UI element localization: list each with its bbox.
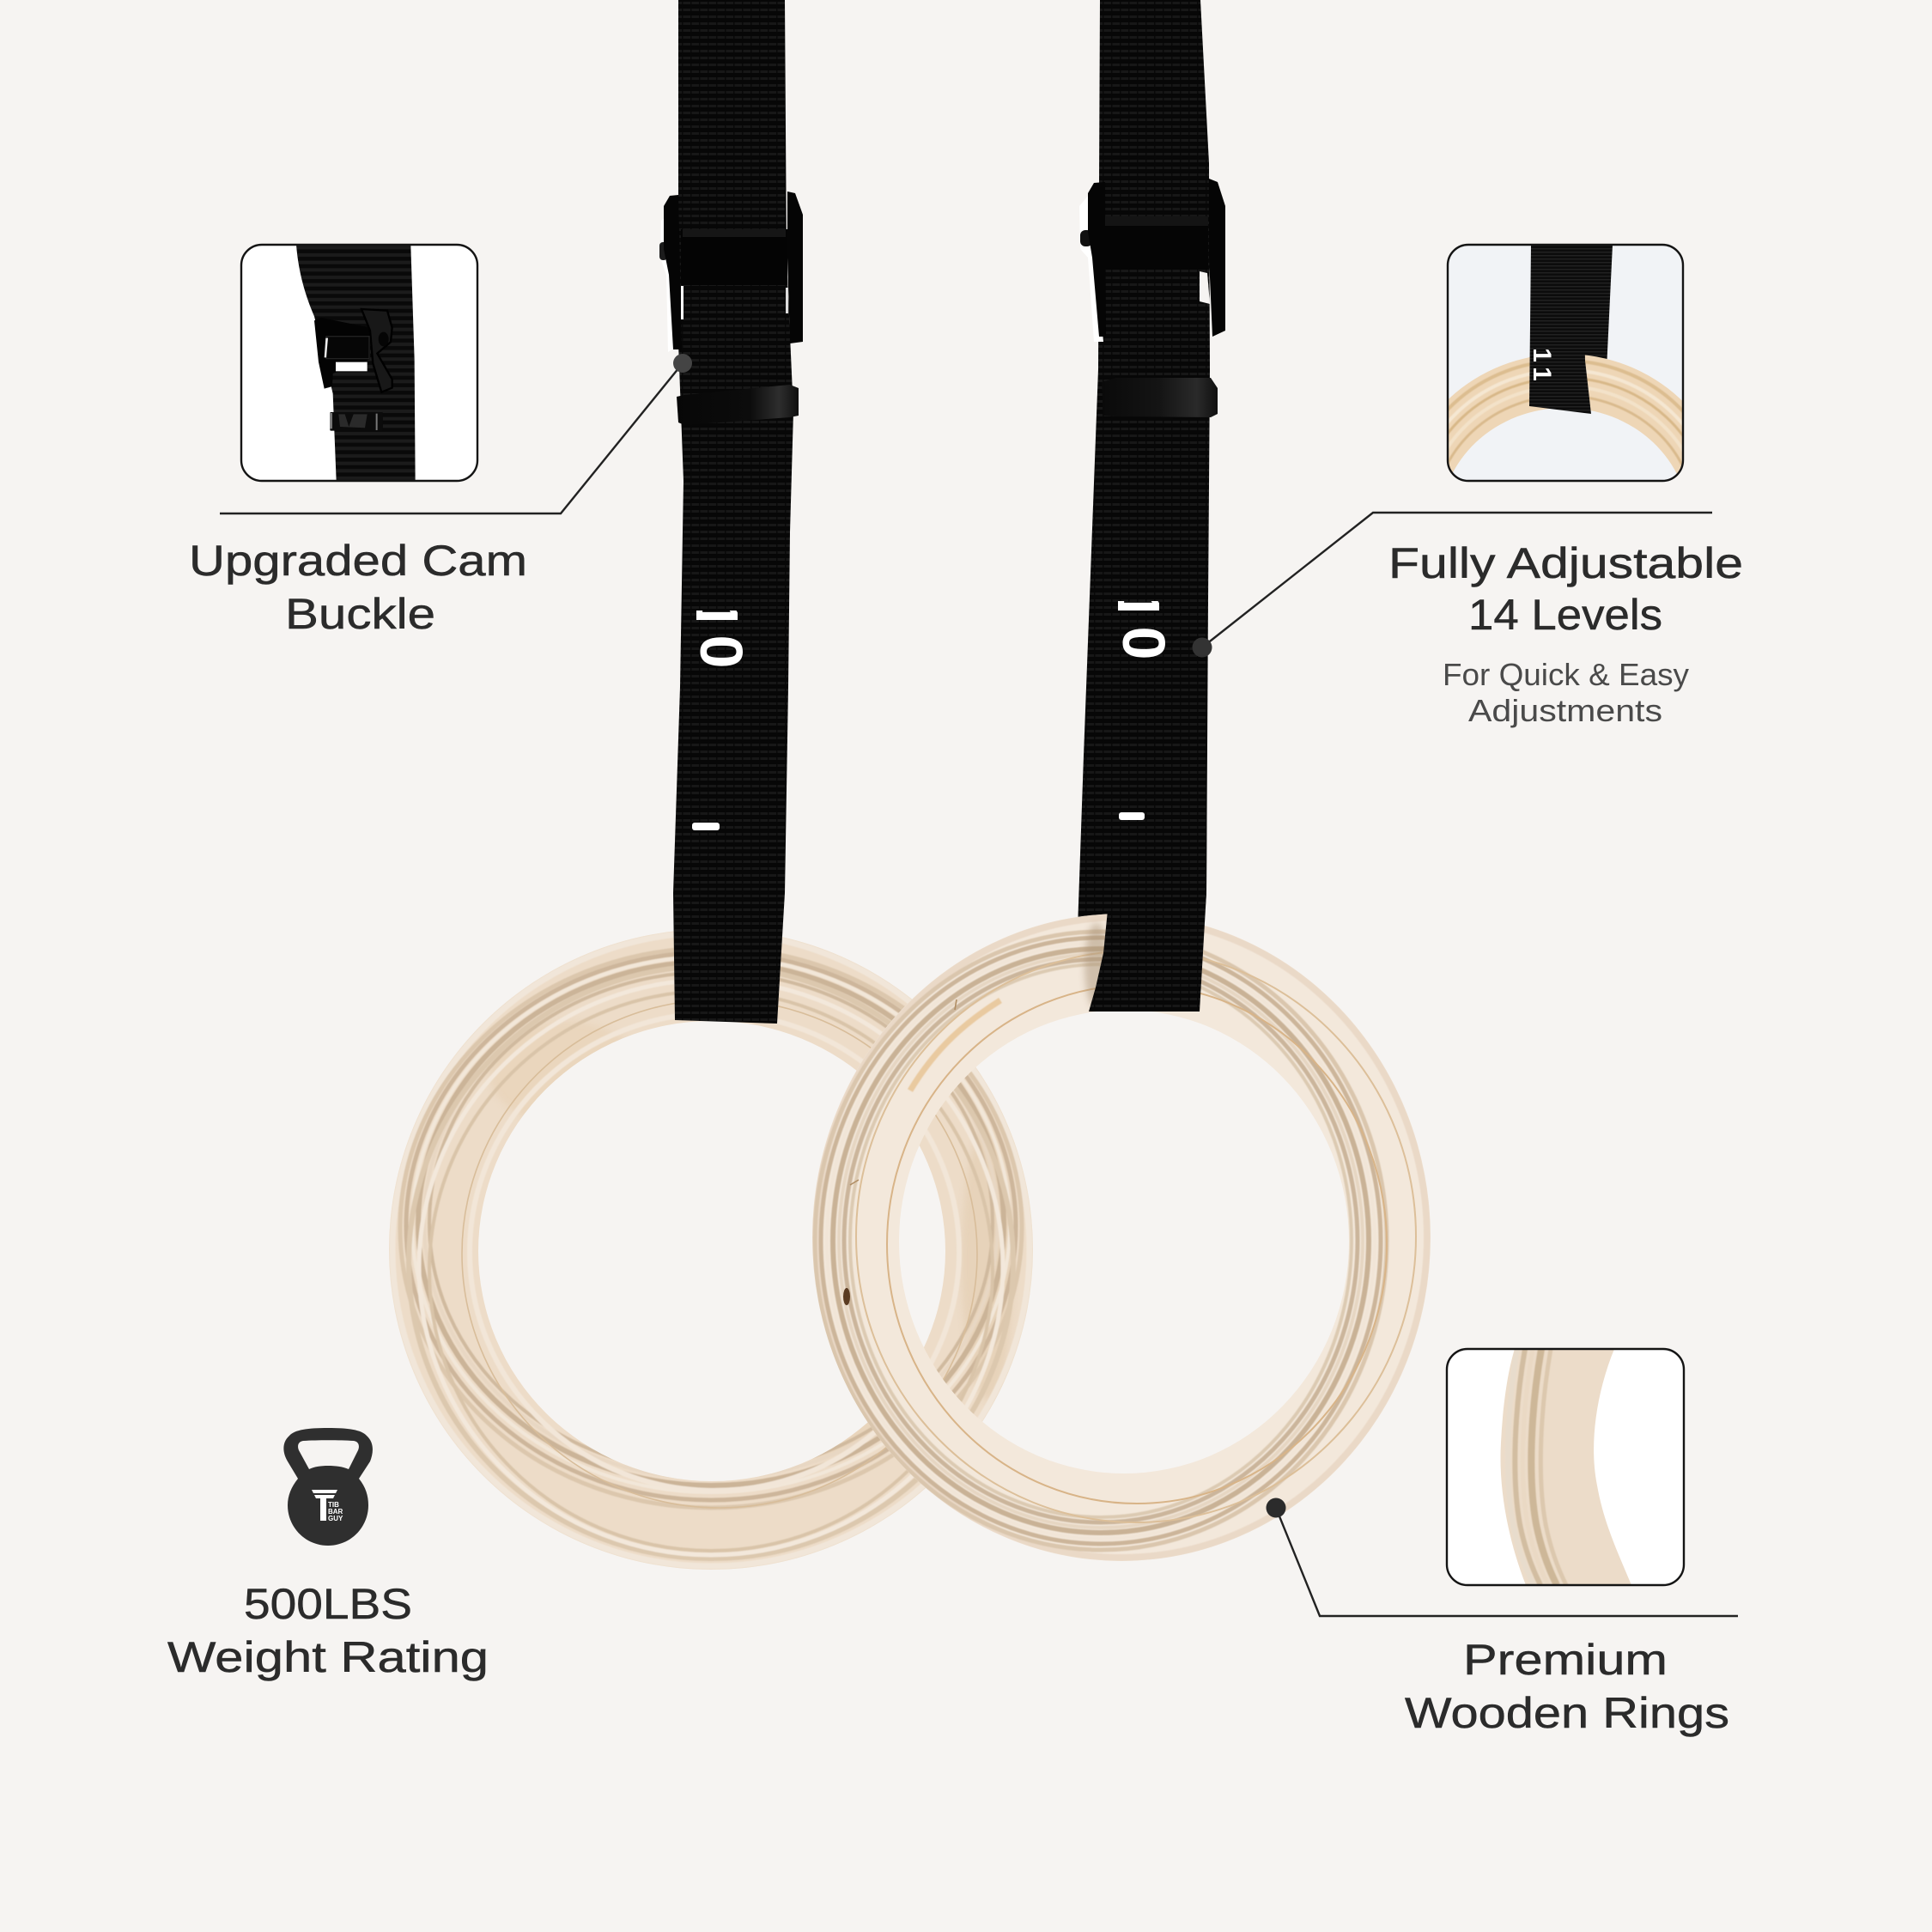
subtext: For Quick & Easy Adjustments: Adjustments — [1468, 693, 1662, 728]
inset front strap — [1529, 245, 1591, 414]
label: 500LBS Weight Rating: 500LBS — [244, 1580, 412, 1628]
strap mark: number 10: 0 — [1110, 627, 1177, 659]
label: Upgraded Cam Buckle: Buckle — [285, 590, 435, 638]
inset strap number: 11 — [1528, 348, 1556, 387]
left cam buckle — [659, 191, 803, 352]
inset rear strap — [1583, 246, 1613, 359]
icon: kettlebell with logo — [283, 1428, 373, 1546]
callout: buckle leader line and dot — [220, 354, 692, 513]
strap mark: number 10: 1 — [1105, 589, 1172, 622]
buckle silver edge — [1079, 195, 1103, 342]
strap tick — [692, 823, 720, 830]
label: Fully Adjustable 14 Levels: Fully Adjustable — [1388, 539, 1743, 587]
inset ring — [1449, 355, 1682, 474]
inset: adjustable strap on ring close-up — [1446, 244, 1685, 483]
label: Upgraded Cam Buckle — [189, 537, 527, 638]
label: 500LBS Weight Rating — [167, 1580, 489, 1681]
label: Fully Adjustable 14 Levels — [1388, 539, 1743, 639]
ring knot and cracks — [843, 999, 957, 1305]
logo: T mark: BAR — [328, 1508, 343, 1516]
buckle right arm — [1209, 179, 1225, 337]
logo: T mark — [312, 1490, 343, 1522]
right wooden ring — [799, 902, 1443, 1571]
infographic: gymnastic rings product features — [167, 0, 1741, 1737]
subtext: For Quick & Easy Adjustments: For Quick & Easy — [1443, 657, 1689, 692]
buckle left arm — [664, 195, 682, 349]
label: Upgraded Cam Buckle: Upgraded Cam — [189, 537, 527, 585]
logo: T mark: GUY — [328, 1515, 343, 1522]
inset keeper — [330, 412, 383, 431]
rear right strap — [1077, 0, 1209, 953]
callout: adjustable leader line and dot — [1192, 513, 1712, 658]
buckle right arm — [787, 191, 803, 343]
label: Premium Wooden Rings — [1405, 1636, 1729, 1737]
buckle bolt — [1080, 230, 1092, 246]
strap mark: number 10 — [696, 611, 743, 666]
label: Premium Wooden Rings: Premium — [1463, 1636, 1668, 1684]
right cam buckle — [1079, 179, 1225, 342]
left strap with number marks — [673, 0, 793, 1024]
subtext: For Quick & Easy Adjustments — [1443, 657, 1689, 728]
left strap keeper — [677, 385, 799, 425]
right strap front with number marks — [1089, 163, 1210, 1012]
buckle slab — [681, 229, 787, 285]
left wooden ring — [378, 919, 1048, 1580]
strap mark: number 10: 1 — [683, 598, 750, 631]
buckle slab — [1105, 216, 1208, 270]
inset strap — [296, 245, 416, 481]
ring grain streak — [910, 1000, 1000, 1091]
right strap keeper — [1102, 378, 1218, 417]
logo: T mark: TIB — [328, 1501, 339, 1509]
inset: wood grain close-up — [1447, 1349, 1684, 1585]
strap tick — [1119, 812, 1145, 820]
label: Fully Adjustable 14 Levels: 14 Levels — [1468, 591, 1662, 639]
buckle left arm — [1088, 182, 1106, 337]
strap mark: number 10: 0 — [688, 635, 755, 668]
inset: cam buckle close-up — [241, 245, 477, 481]
buckle bolt — [659, 242, 667, 260]
label: Premium Wooden Rings: Wooden Rings — [1405, 1689, 1729, 1737]
inset buckle — [314, 309, 392, 392]
strap mark: number 10 — [1118, 601, 1165, 658]
label: 500LBS Weight Rating: Weight Rating — [167, 1633, 489, 1681]
callout: wood leader line and dot — [1266, 1498, 1738, 1616]
buckle silver edge — [660, 215, 675, 352]
